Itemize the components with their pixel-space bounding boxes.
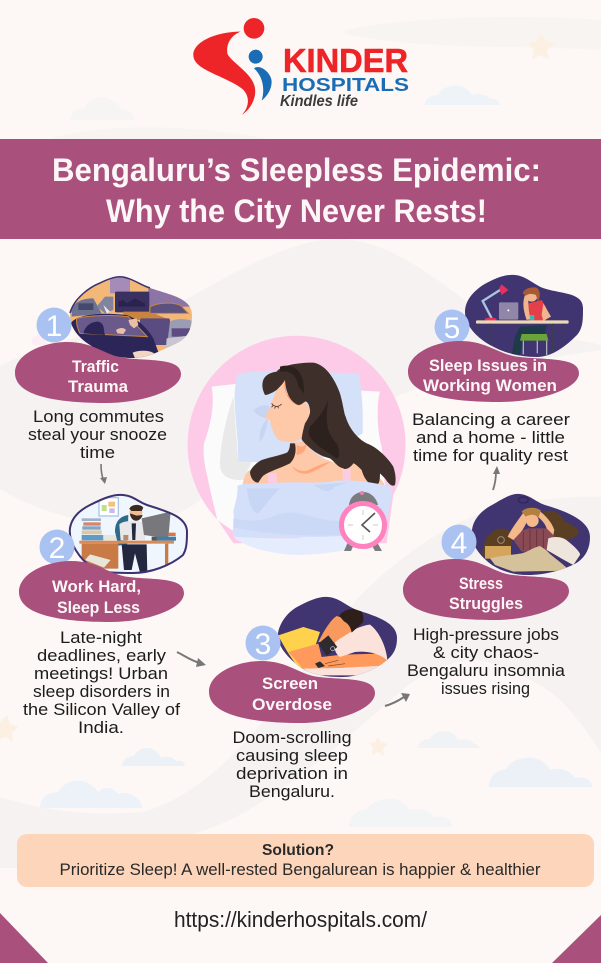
illustration: traffic jam	[69, 276, 192, 358]
text 4: High-pressure jobs	[413, 625, 559, 644]
title line 2: Why the City Never Rests!	[106, 193, 487, 229]
solution text: Prioritize Sleep! A well-rested Bengalurean is happier & healthier	[60, 860, 541, 879]
text 4	[407, 625, 566, 698]
number badge 1	[36, 308, 72, 343]
logo mark: swoosh figure	[193, 18, 272, 115]
illustration: stressed man in bed	[472, 494, 590, 575]
panel 3: screen overdose	[209, 594, 402, 801]
text 1	[28, 407, 167, 462]
icon: alarm clock	[342, 491, 384, 551]
text 4: issues rising	[441, 679, 530, 698]
text 5: time for quality rest	[413, 446, 568, 465]
text 2: India.	[78, 718, 124, 737]
text 3: Bengaluru.	[249, 782, 335, 801]
text 3: causing sleep	[236, 746, 348, 765]
heading blob 5	[408, 341, 579, 402]
number badge 5: 5	[444, 312, 460, 345]
illustration: man at desk	[68, 492, 192, 578]
text 4: Bengaluru insomnia	[407, 661, 566, 680]
corner triangle left	[0, 913, 48, 963]
text 5	[412, 410, 570, 465]
text 1: time	[80, 443, 115, 462]
heading blob 3: Screen	[262, 674, 318, 693]
text 2: sleep disorders in	[33, 682, 170, 701]
arrow 2 to 3	[177, 652, 206, 667]
text 3	[232, 728, 352, 801]
panel 1: traffic trauma	[15, 275, 197, 462]
heading blob 4: Stress	[459, 574, 503, 593]
heading blob 2: Sleep Less	[57, 598, 140, 617]
arrow 4 to 5	[493, 466, 500, 490]
text 3: Doom-scrolling	[232, 728, 352, 747]
heading blob 4: Struggles	[449, 594, 523, 613]
logo tagline: Kindles life	[280, 93, 358, 110]
illustration: scrolling in bed	[278, 596, 397, 677]
text 2: meetings! Urban	[34, 664, 168, 683]
logo: Kinder Hospitals	[193, 18, 409, 115]
number badge 3: 3	[255, 628, 271, 661]
panel 5: sleep issues in working women	[408, 273, 587, 465]
heading blob 2: Work Hard,	[52, 577, 141, 596]
arrow 1 to 2	[100, 464, 107, 484]
logo wordmark: KINDER	[283, 42, 408, 79]
number badge 2: 2	[49, 532, 65, 565]
heading blob 3	[209, 661, 375, 723]
arrow 3 to 4	[385, 693, 410, 706]
number badge 5	[434, 310, 470, 345]
corner triangle right	[552, 915, 601, 963]
panel 4: stress struggles	[403, 492, 593, 698]
text 2: Late-night	[60, 628, 142, 647]
solution heading: Solution?	[262, 842, 334, 859]
heading blob 1: Traffic	[72, 357, 119, 376]
text 2	[23, 628, 180, 737]
central illustration: sleeping woman	[188, 336, 406, 555]
number badge 4: 4	[451, 527, 467, 560]
title banner	[0, 139, 601, 239]
heading blob 1: Trauma	[68, 377, 129, 396]
panel 2: work hard sleep less	[19, 492, 192, 737]
heading blob 4	[403, 559, 569, 620]
number badge 4	[442, 524, 476, 560]
logo subword: HOSPITALS	[282, 75, 409, 95]
text 1: steal your snooze	[28, 425, 167, 444]
text 1: Long commutes	[33, 407, 164, 426]
illustration: woman at laptop	[463, 273, 587, 360]
text 5: Balancing a career	[412, 410, 570, 429]
heading blob 1	[15, 342, 181, 403]
title line 1: Bengaluru’s Sleepless Epidemic:	[52, 152, 541, 188]
heading blob 2	[19, 561, 184, 622]
heading blob 3: Overdose	[252, 695, 332, 714]
heading blob 5: Sleep Issues in	[429, 356, 547, 375]
number badge 1: 1	[46, 310, 62, 343]
number badge 2	[40, 530, 74, 565]
text 2: deadlines, early	[37, 646, 167, 665]
solution box	[17, 834, 594, 887]
text 4: & city chaos-	[433, 643, 539, 662]
number badge 3	[246, 626, 280, 661]
text 5: and a home - little	[416, 428, 565, 447]
text 3: deprivation in	[236, 764, 348, 783]
website url: https://kinderhospitals.com/	[174, 907, 428, 932]
text 2: the Silicon Valley of	[23, 700, 180, 719]
heading blob 5: Working Women	[423, 376, 557, 395]
